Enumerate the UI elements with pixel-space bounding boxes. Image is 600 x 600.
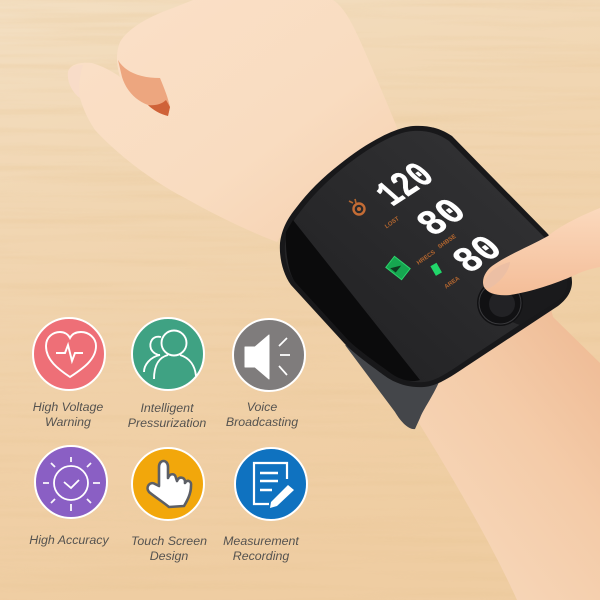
photo: pressing finger bbox=[483, 208, 600, 295]
icon: voice broadcasting bbox=[233, 319, 305, 391]
label: touch screen design: Touch Screen bbox=[131, 534, 207, 548]
indicator: heart icon bbox=[349, 199, 364, 214]
label: measurement recording: Recording bbox=[233, 549, 289, 563]
wrist strap bbox=[345, 345, 440, 429]
label: measurement recording: Measurement bbox=[223, 534, 299, 548]
photo: forearm bbox=[417, 305, 600, 600]
thumbnail bbox=[68, 65, 83, 98]
dark reflection band bbox=[286, 220, 420, 381]
indicator label: mid: SHBSE bbox=[437, 234, 458, 251]
label: voice broadcasting: Broadcasting bbox=[226, 415, 298, 429]
indicator label: unit: LOST bbox=[384, 216, 401, 230]
crease dark edge bbox=[148, 100, 170, 116]
indicator: green level bbox=[430, 263, 442, 276]
reading: systolic 120: 120 bbox=[366, 155, 446, 215]
label: touch screen design: Design bbox=[150, 549, 188, 563]
icon: high voltage warning bbox=[33, 318, 105, 390]
icon: high accuracy bbox=[35, 446, 107, 518]
indicator: green battery bbox=[386, 256, 410, 280]
label: high accuracy: High Accuracy bbox=[29, 533, 110, 547]
reading: diastolic 80: 80 bbox=[408, 192, 478, 245]
reading: pulse 80: 80 bbox=[444, 229, 514, 282]
label: intelligent pressurization: Intelligent bbox=[140, 401, 194, 415]
label: intelligent pressurization: Pressurization bbox=[128, 416, 206, 430]
power button bbox=[477, 280, 523, 326]
icon: measurement recording bbox=[235, 448, 307, 520]
indicator label: left: HRECS bbox=[416, 250, 437, 267]
blood pressure monitor bbox=[280, 126, 572, 387]
device body bbox=[280, 126, 572, 387]
label: high voltage warning: Warning bbox=[45, 415, 91, 429]
finger crease shadow bbox=[118, 60, 170, 116]
fingernail bbox=[484, 262, 510, 288]
icon: intelligent pressurization bbox=[132, 318, 204, 390]
icon: touch screen design bbox=[132, 448, 204, 520]
label: high voltage warning: High Voltage bbox=[33, 400, 103, 414]
photo: fist and thumb bbox=[68, 0, 398, 242]
indicator label: bottom: AREA bbox=[444, 275, 462, 291]
glossy panel bbox=[285, 131, 567, 382]
label: voice broadcasting: Voice bbox=[247, 400, 277, 414]
lower right dark zone bbox=[480, 270, 568, 325]
